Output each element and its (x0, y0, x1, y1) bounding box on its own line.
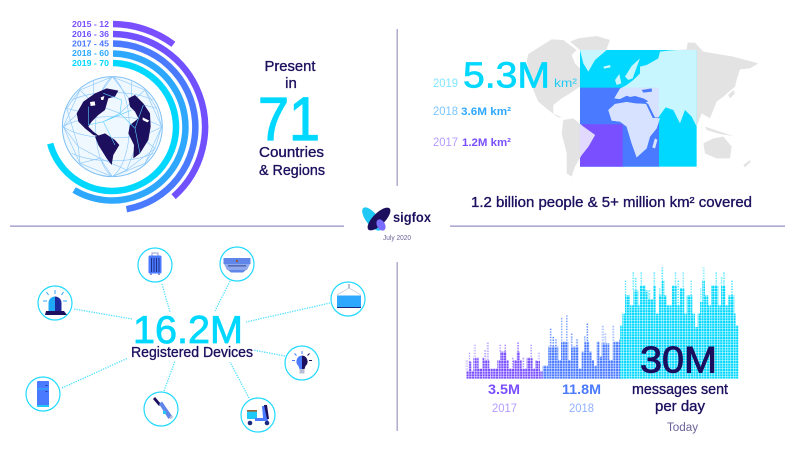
logo: sigfox: sigfox (393, 209, 431, 225)
stat: 3.5M 2017: 3.5M (488, 382, 520, 397)
world map with coverage squares (527, 36, 758, 177)
icon: alarm siren (38, 286, 72, 320)
stat: 2018 (433, 106, 511, 118)
chart: dotted bars (466, 262, 739, 379)
year labels: 2018 - 60 (72, 48, 109, 58)
stat: 3.5M 2017: 2017 (492, 403, 517, 415)
icon: butterfly mark (359, 204, 394, 234)
panel: messages per day (466, 262, 739, 434)
icon: light bulb (285, 346, 319, 380)
logo: sigfox: July 2020 (383, 233, 411, 242)
year labels: 2017 - 45 (72, 38, 109, 48)
year arcs (50, 24, 205, 209)
number: 16.2M: 16.2M (133, 309, 243, 352)
stat: 11.8M 2018: 2018 (569, 403, 594, 415)
icon: globe with network (62, 77, 162, 177)
stat: 2017: 1.2M km² (462, 137, 511, 149)
stat: 11.8M 2018 (562, 382, 601, 415)
text: Countries: Countries (259, 144, 324, 161)
stat: 2019: km² (554, 76, 577, 90)
year labels (72, 19, 109, 68)
icon: shipping container (331, 282, 365, 316)
number: 30M: 30M (640, 340, 717, 380)
icon: thermometer sensor (144, 392, 178, 426)
stat: 2017: 2017 (433, 137, 458, 149)
panel: countries present (50, 19, 325, 209)
heading: Present in: Present (264, 58, 316, 75)
text: Regions: & Regions (259, 162, 325, 179)
stat: 11.8M 2018: 11.8M (562, 382, 601, 397)
caption: 1.2 billion people & 5+ million km² covered (471, 195, 752, 211)
text: Registered Devices: Registered Devices (131, 345, 253, 361)
stat: 2019 (433, 54, 577, 96)
panel: registered devices (26, 247, 365, 432)
bars: 2017 (466, 342, 543, 379)
number: 71: 71 (258, 85, 320, 153)
icon: delivery scooter (241, 398, 275, 432)
icon: suitcase (138, 248, 172, 282)
stat: 2018: 2018 (433, 106, 458, 118)
bars: 2018 (543, 315, 623, 379)
stat: 2019: 5.3M (463, 54, 550, 96)
panel: coverage map (433, 36, 758, 211)
text: in: in (285, 75, 297, 92)
dotted connectors (62, 281, 330, 398)
icon: refrigerator (26, 377, 60, 411)
stat: 2019: 2019 (433, 78, 458, 90)
logo: sigfox (359, 204, 431, 242)
year labels: 2015 - 12 (72, 19, 109, 29)
year labels: 2019 - 70 (72, 58, 109, 68)
year labels: 2016 - 36 (72, 29, 109, 39)
bars: today (620, 267, 738, 379)
text: messages sent: messages sent (632, 381, 729, 398)
text: per day: per day (655, 398, 705, 415)
stat: 2017 (433, 137, 511, 149)
stat: 3.5M 2017 (488, 382, 520, 415)
text: Today: Today (667, 422, 698, 434)
icon: smoke detector (220, 247, 254, 281)
stat: 2018: 3.6M km² (461, 106, 511, 118)
